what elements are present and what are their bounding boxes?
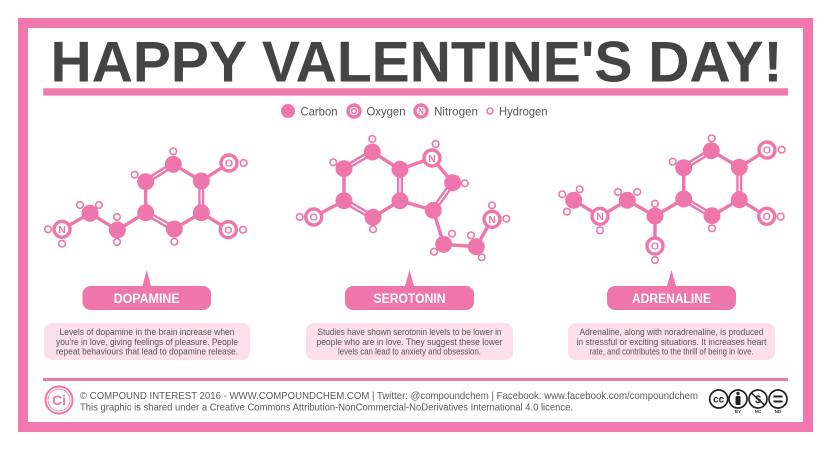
molecule: adrenaline: O bbox=[763, 145, 771, 157]
icon: by: BY bbox=[735, 409, 741, 414]
molecule: serotonin: O bbox=[310, 212, 318, 224]
molecule: dopamine: O bbox=[224, 224, 232, 236]
molecule: adrenaline: O bbox=[651, 241, 659, 253]
label: dopamine: DOPAMINE bbox=[114, 291, 180, 306]
icon: nc: NC bbox=[755, 409, 762, 414]
molecule: dopamine: N bbox=[58, 224, 66, 236]
text block: adrenaline: rate, and contributes to the thrill of being in love. bbox=[590, 346, 754, 358]
molecule: serotonin bbox=[296, 136, 510, 261]
molecule: adrenaline: N bbox=[596, 211, 604, 223]
molecule: serotonin: N bbox=[428, 153, 436, 165]
label: adrenaline bbox=[607, 270, 736, 310]
label: adrenaline: ADRENALINE bbox=[632, 291, 711, 306]
icon: nc bbox=[749, 390, 767, 414]
legend: carbon: Carbon bbox=[300, 104, 338, 118]
legend: hydrogen: Hydrogen bbox=[499, 104, 548, 118]
legend: nitrogen bbox=[415, 104, 478, 118]
icons: creative commons licence bbox=[710, 390, 787, 414]
footer credits bbox=[80, 390, 698, 414]
label: dopamine bbox=[82, 270, 211, 310]
text block: adrenaline: Adrenaline, along with noradrenaline, is produced bbox=[580, 327, 764, 338]
label: serotonin: SEROTONIN bbox=[374, 291, 446, 306]
molecule: dopamine: O bbox=[225, 158, 233, 170]
legend bbox=[281, 104, 548, 118]
icon: compound interest logo: Ci bbox=[52, 392, 66, 408]
molecule: dopamine bbox=[45, 148, 247, 247]
footer credits: This graphic is shared under a Creative Commons Attribution-NonCommercial-NoDerivatives International 4.0 licence. bbox=[80, 402, 573, 414]
text block: serotonin bbox=[306, 323, 513, 360]
legend: oxygen: Oxygen bbox=[366, 104, 406, 118]
text block: adrenaline bbox=[568, 323, 775, 360]
legend: carbon bbox=[281, 104, 338, 118]
text block: serotonin: levels can lead to anxiety and obsession. bbox=[338, 346, 481, 358]
text block: serotonin: people who are in love. They suggest these lower bbox=[316, 337, 502, 348]
legend: nitrogen: N bbox=[418, 107, 424, 116]
text block: dopamine: repeat behaviours that lead to dopamine release. bbox=[56, 346, 238, 358]
text block: dopamine bbox=[44, 323, 250, 360]
molecule: adrenaline bbox=[559, 135, 785, 263]
icon: nd: ND bbox=[775, 409, 782, 414]
legend: oxygen bbox=[348, 104, 406, 118]
title underline bbox=[43, 88, 788, 96]
footer credits: © COMPOUND INTEREST 2016 - WWW.COMPOUNDCHEM.COM | Twitter: @compoundchem | Facebook: www.facebook.com/compoundchem bbox=[80, 390, 698, 402]
text block: dopamine: Levels of dopamine in the brain increase when bbox=[60, 327, 234, 338]
icon: compound interest logo bbox=[46, 386, 72, 414]
icon: cc: cc bbox=[713, 394, 725, 406]
title: HAPPY VALENTINE'S DAY! bbox=[50, 31, 782, 95]
molecule: serotonin: N bbox=[488, 214, 496, 226]
molecule: adrenaline: O bbox=[763, 211, 771, 223]
label: serotonin bbox=[345, 270, 474, 310]
text block: dopamine: you're in love, giving feelings of pleasure. People bbox=[56, 337, 238, 348]
text block: adrenaline: in stressful or exciting situations. It increases heart bbox=[576, 337, 767, 348]
text block: serotonin: Studies have shown serotonin levels to be lower in bbox=[318, 327, 502, 338]
footer rule bbox=[43, 378, 788, 381]
legend: nitrogen: Nitrogen bbox=[434, 104, 478, 118]
icon: nc: $ bbox=[755, 394, 761, 406]
